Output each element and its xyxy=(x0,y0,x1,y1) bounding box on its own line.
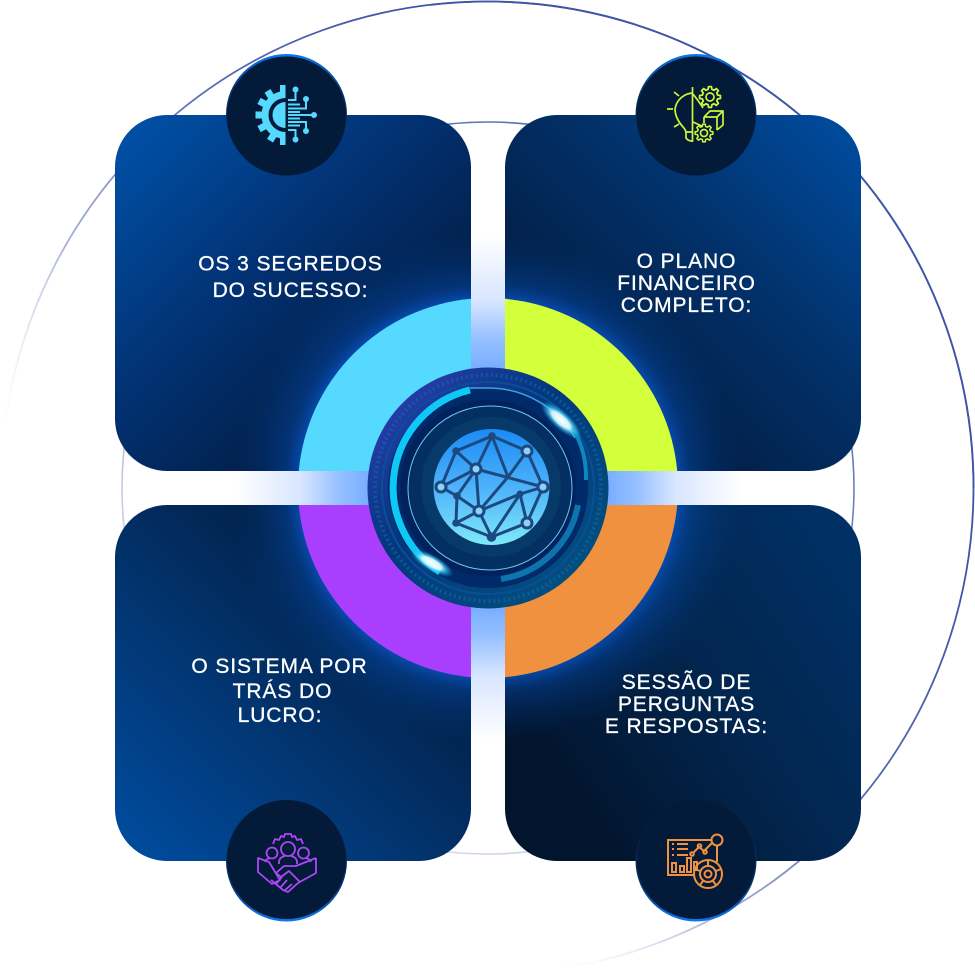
text: os 3 segredos: OS 3 SEGREDOS xyxy=(198,252,383,276)
icon: network globe xyxy=(436,432,548,542)
text: o plano financeiro: O PLANO xyxy=(637,250,736,273)
quadrant: cyan xyxy=(299,299,471,471)
panel: bottom right card xyxy=(505,505,861,861)
text: o plano financeiro xyxy=(617,250,756,317)
badge: top left xyxy=(226,54,347,176)
quadrant: orange xyxy=(505,505,677,677)
text: sessao de perguntas: E RESPOSTAS: xyxy=(605,715,768,738)
text: os 3 segredos: DO SUCESSO: xyxy=(213,279,368,302)
panel: bottom left card xyxy=(115,505,471,861)
quadrant: lime xyxy=(505,299,677,471)
text: o sistema por tras do lucro: O SISTEMA POR xyxy=(191,655,368,678)
text: o sistema por tras do lucro xyxy=(191,655,368,727)
panel: top right card xyxy=(505,115,861,471)
text: sessao de perguntas: SESSÃO DE xyxy=(622,670,751,694)
quadrant: purple xyxy=(299,505,471,677)
text: sessao de perguntas: PERGUNTAS xyxy=(618,693,755,716)
panel: top left card xyxy=(115,115,471,471)
text: o plano financeiro: COMPLETO: xyxy=(621,294,752,317)
icon: dashboard with chart and target xyxy=(668,834,722,888)
center glow on cards xyxy=(249,248,728,731)
icon: handshake with team and gear xyxy=(258,834,316,892)
text: os 3 segredos xyxy=(198,252,383,302)
text: o plano financeiro: FINANCEIRO xyxy=(617,272,756,295)
inner ring xyxy=(122,122,854,854)
badge: bottom right xyxy=(636,800,756,922)
badge: bottom left xyxy=(226,800,347,922)
text: sessao de perguntas xyxy=(605,670,768,738)
central hub xyxy=(368,368,608,608)
cross strips xyxy=(225,225,751,751)
icon: gear with circuit xyxy=(256,85,317,145)
badge: top right xyxy=(636,54,756,176)
text: o sistema por tras do lucro: TRÁS DO xyxy=(233,680,332,703)
icon: bulb with gears xyxy=(667,87,723,142)
text: o sistema por tras do lucro: LUCRO: xyxy=(238,704,322,727)
